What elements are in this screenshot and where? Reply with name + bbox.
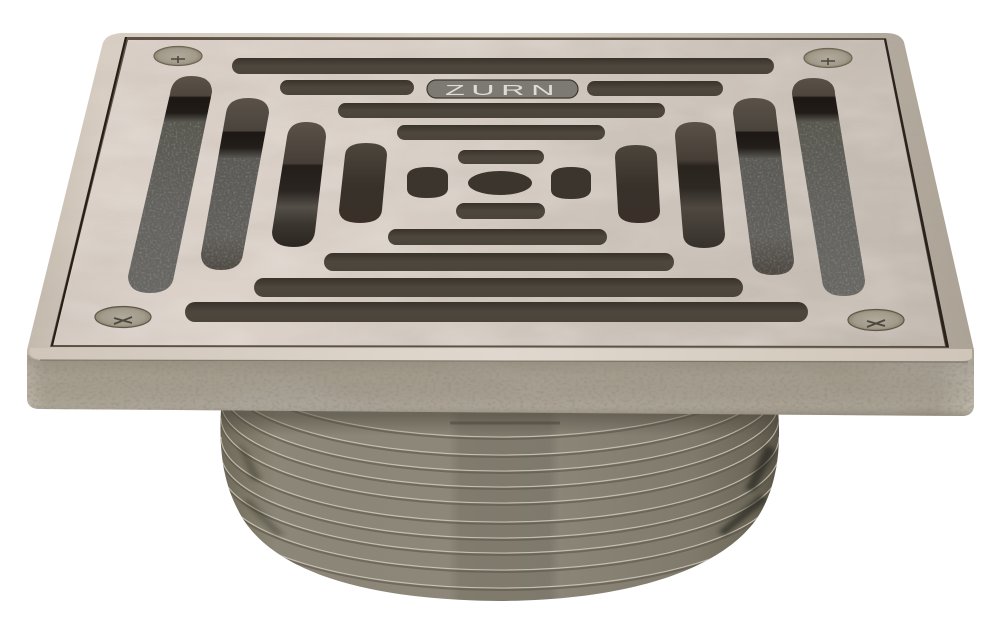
thread grooves: [220, 411, 779, 591]
threaded body: [215, 352, 785, 601]
right vertical slots: [615, 78, 865, 296]
flange front face: [27, 350, 974, 417]
grate plate: [50, 37, 949, 348]
slot floor texture: [128, 122, 866, 296]
flange top rim: [27, 33, 974, 363]
screw: top left: [154, 46, 202, 66]
horizontal slots: [185, 58, 808, 322]
edge shadows: [238, 445, 776, 535]
ZURN badge: [427, 80, 578, 99]
thread highlights: [220, 410, 779, 588]
centre openings: [407, 167, 591, 199]
screw: bottom right: [848, 310, 904, 330]
centre seam streak: [450, 422, 560, 424]
screw: top right: [804, 48, 852, 68]
screw: bottom left: [95, 306, 151, 328]
ZURN badge: ZURN: [445, 82, 561, 99]
left vertical slots: [128, 76, 387, 293]
